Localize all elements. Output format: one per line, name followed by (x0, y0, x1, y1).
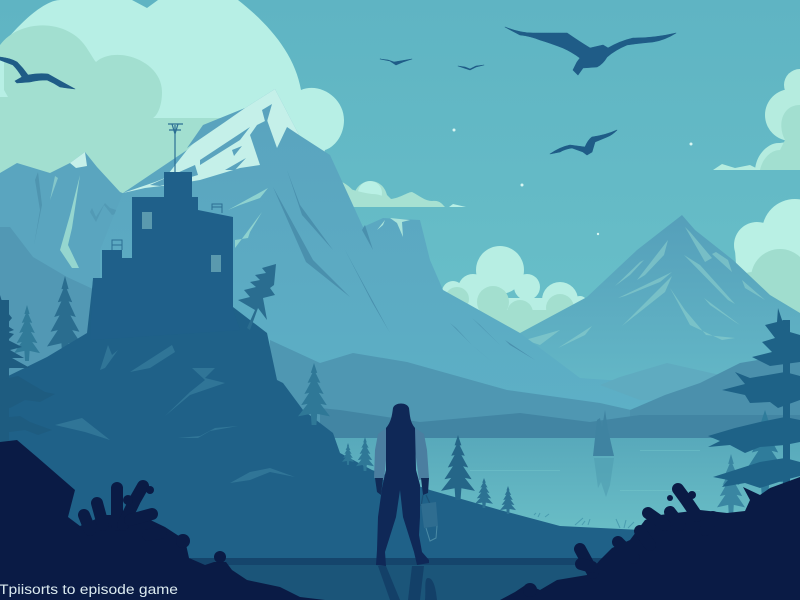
low hill left (0, 227, 95, 380)
small bird (380, 59, 412, 65)
lower band (190, 558, 615, 565)
caption: Tpiisorts to episode game (0, 582, 178, 597)
main snowy peak (100, 89, 680, 420)
rock streaks (273, 170, 535, 362)
large tree left (0, 295, 55, 442)
far shore (320, 408, 800, 438)
castle hill (0, 280, 640, 570)
large cloud behind mountains (0, 0, 344, 240)
peak snow (123, 89, 299, 193)
bag strap (426, 526, 437, 541)
clouds centre lower (442, 246, 587, 345)
background trees left (14, 276, 83, 361)
shore trees (342, 435, 516, 514)
small bird right (458, 65, 484, 70)
grass tufts (534, 513, 634, 528)
clouds right lower (734, 199, 800, 340)
window upper (142, 212, 152, 229)
spire reflection (594, 458, 614, 497)
right mountain (520, 215, 800, 420)
figure (374, 404, 438, 566)
foreground right bush (500, 477, 800, 600)
distant right hill (600, 363, 720, 400)
castle (90, 124, 240, 340)
arms (374, 428, 429, 480)
stars (452, 128, 692, 235)
body and legs (376, 404, 429, 566)
clouds right top (713, 69, 800, 170)
birds (0, 27, 676, 155)
large bird (505, 27, 676, 75)
figure reflection (378, 566, 437, 600)
tree by ridge (298, 363, 330, 425)
small cloud centre (342, 181, 466, 207)
railings (112, 204, 222, 250)
large tree right (708, 308, 800, 488)
lake reflections (470, 450, 700, 491)
window lower (211, 255, 221, 272)
cliff tree (238, 264, 276, 330)
foreground left rocks and bush (0, 440, 325, 600)
bird upper left (0, 57, 75, 89)
lake (320, 438, 800, 558)
spire rock in lake (593, 410, 614, 456)
left mountain (0, 152, 170, 340)
water foreground (190, 565, 615, 600)
pale trees right (717, 410, 787, 516)
hands (375, 478, 429, 495)
bag handle (421, 495, 431, 506)
hill rock highlights (55, 345, 295, 483)
antenna (168, 124, 183, 172)
medium bird right (550, 130, 617, 155)
secondary ridge snow (377, 218, 410, 237)
mid ridge (270, 340, 720, 440)
bag (421, 502, 438, 528)
ridge right (630, 352, 800, 440)
